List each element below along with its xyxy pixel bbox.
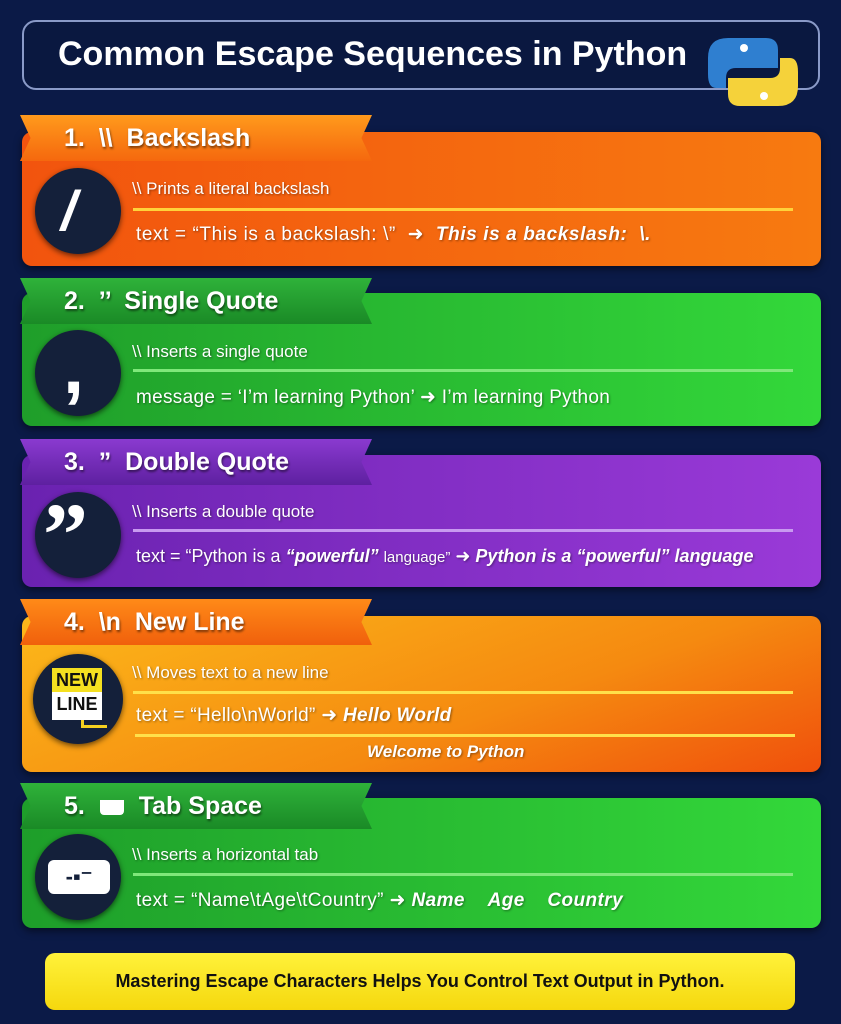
panel: tab space: text = “Name\tAge\tCountry” ➜ Name Age Country bbox=[136, 890, 623, 911]
icon: new line: NEW bbox=[56, 670, 98, 690]
ribbon: 4: 4. \n New Line bbox=[64, 608, 245, 636]
ribbon: 5 bbox=[20, 783, 372, 829]
panel: single quote: \\ Inserts a single quote bbox=[132, 342, 308, 361]
icon: comma bbox=[35, 330, 121, 416]
footer callout bbox=[45, 953, 795, 1010]
ribbon: 2: 2. ’’ Single Quote bbox=[64, 287, 278, 315]
panel: double quote: \\ Inserts a double quote bbox=[132, 502, 314, 521]
ribbon: 2 bbox=[20, 278, 372, 324]
panel: backslash: \\ Prints a literal backslash bbox=[132, 179, 329, 198]
panel: new line bbox=[22, 616, 821, 772]
panel: new line: Welcome to Python bbox=[367, 742, 524, 761]
ribbon: 1: 1. \\ Backslash bbox=[64, 124, 250, 152]
panel: double quote bbox=[22, 455, 821, 587]
panel: new line: text = “Hello\nWorld” ➜ Hello World bbox=[136, 705, 452, 726]
title bbox=[22, 20, 820, 90]
ribbon: 5: 5. Tab Space bbox=[64, 792, 262, 820]
icon: new line bbox=[33, 654, 123, 744]
icon: slash bbox=[35, 168, 121, 254]
ribbon: 1 bbox=[20, 115, 372, 161]
icon: double quote: ” bbox=[43, 486, 88, 585]
panel: tab space: \\ Inserts a horizontal tab bbox=[132, 845, 318, 864]
icon: python logo bbox=[708, 38, 798, 106]
panel: single quote bbox=[22, 293, 821, 426]
ribbon: 4 bbox=[20, 599, 372, 645]
footer callout: Mastering Escape Characters Helps You Control Text Output in Python. bbox=[115, 971, 725, 991]
panel: double quote: text = “Python is a “powerful” language” ➜ Python is a “powerful” language bbox=[136, 546, 753, 566]
ribbon: 3 bbox=[20, 439, 372, 485]
icon: comma: , bbox=[63, 325, 84, 410]
icon: new line: LINE bbox=[56, 694, 98, 714]
icon: slash: / bbox=[61, 179, 77, 242]
ribbon: 3: 3. ” Double Quote bbox=[64, 448, 289, 476]
title: Common Escape Sequences in Python bbox=[58, 35, 687, 73]
icon: tab key: -▪⁻ bbox=[66, 864, 92, 889]
icon: tab key bbox=[35, 834, 121, 920]
panel: backslash bbox=[22, 132, 821, 266]
panel: tab space bbox=[22, 798, 821, 928]
panel: new line: \\ Moves text to a new line bbox=[132, 663, 329, 682]
icon: double quote bbox=[35, 492, 121, 578]
panel: single quote: message = ‘I’m learning Python’ ➜ I’m learning Python bbox=[136, 387, 610, 408]
panel: backslash: text = “This is a backslash: \” ➜ This is a backslash: \. bbox=[136, 224, 651, 245]
